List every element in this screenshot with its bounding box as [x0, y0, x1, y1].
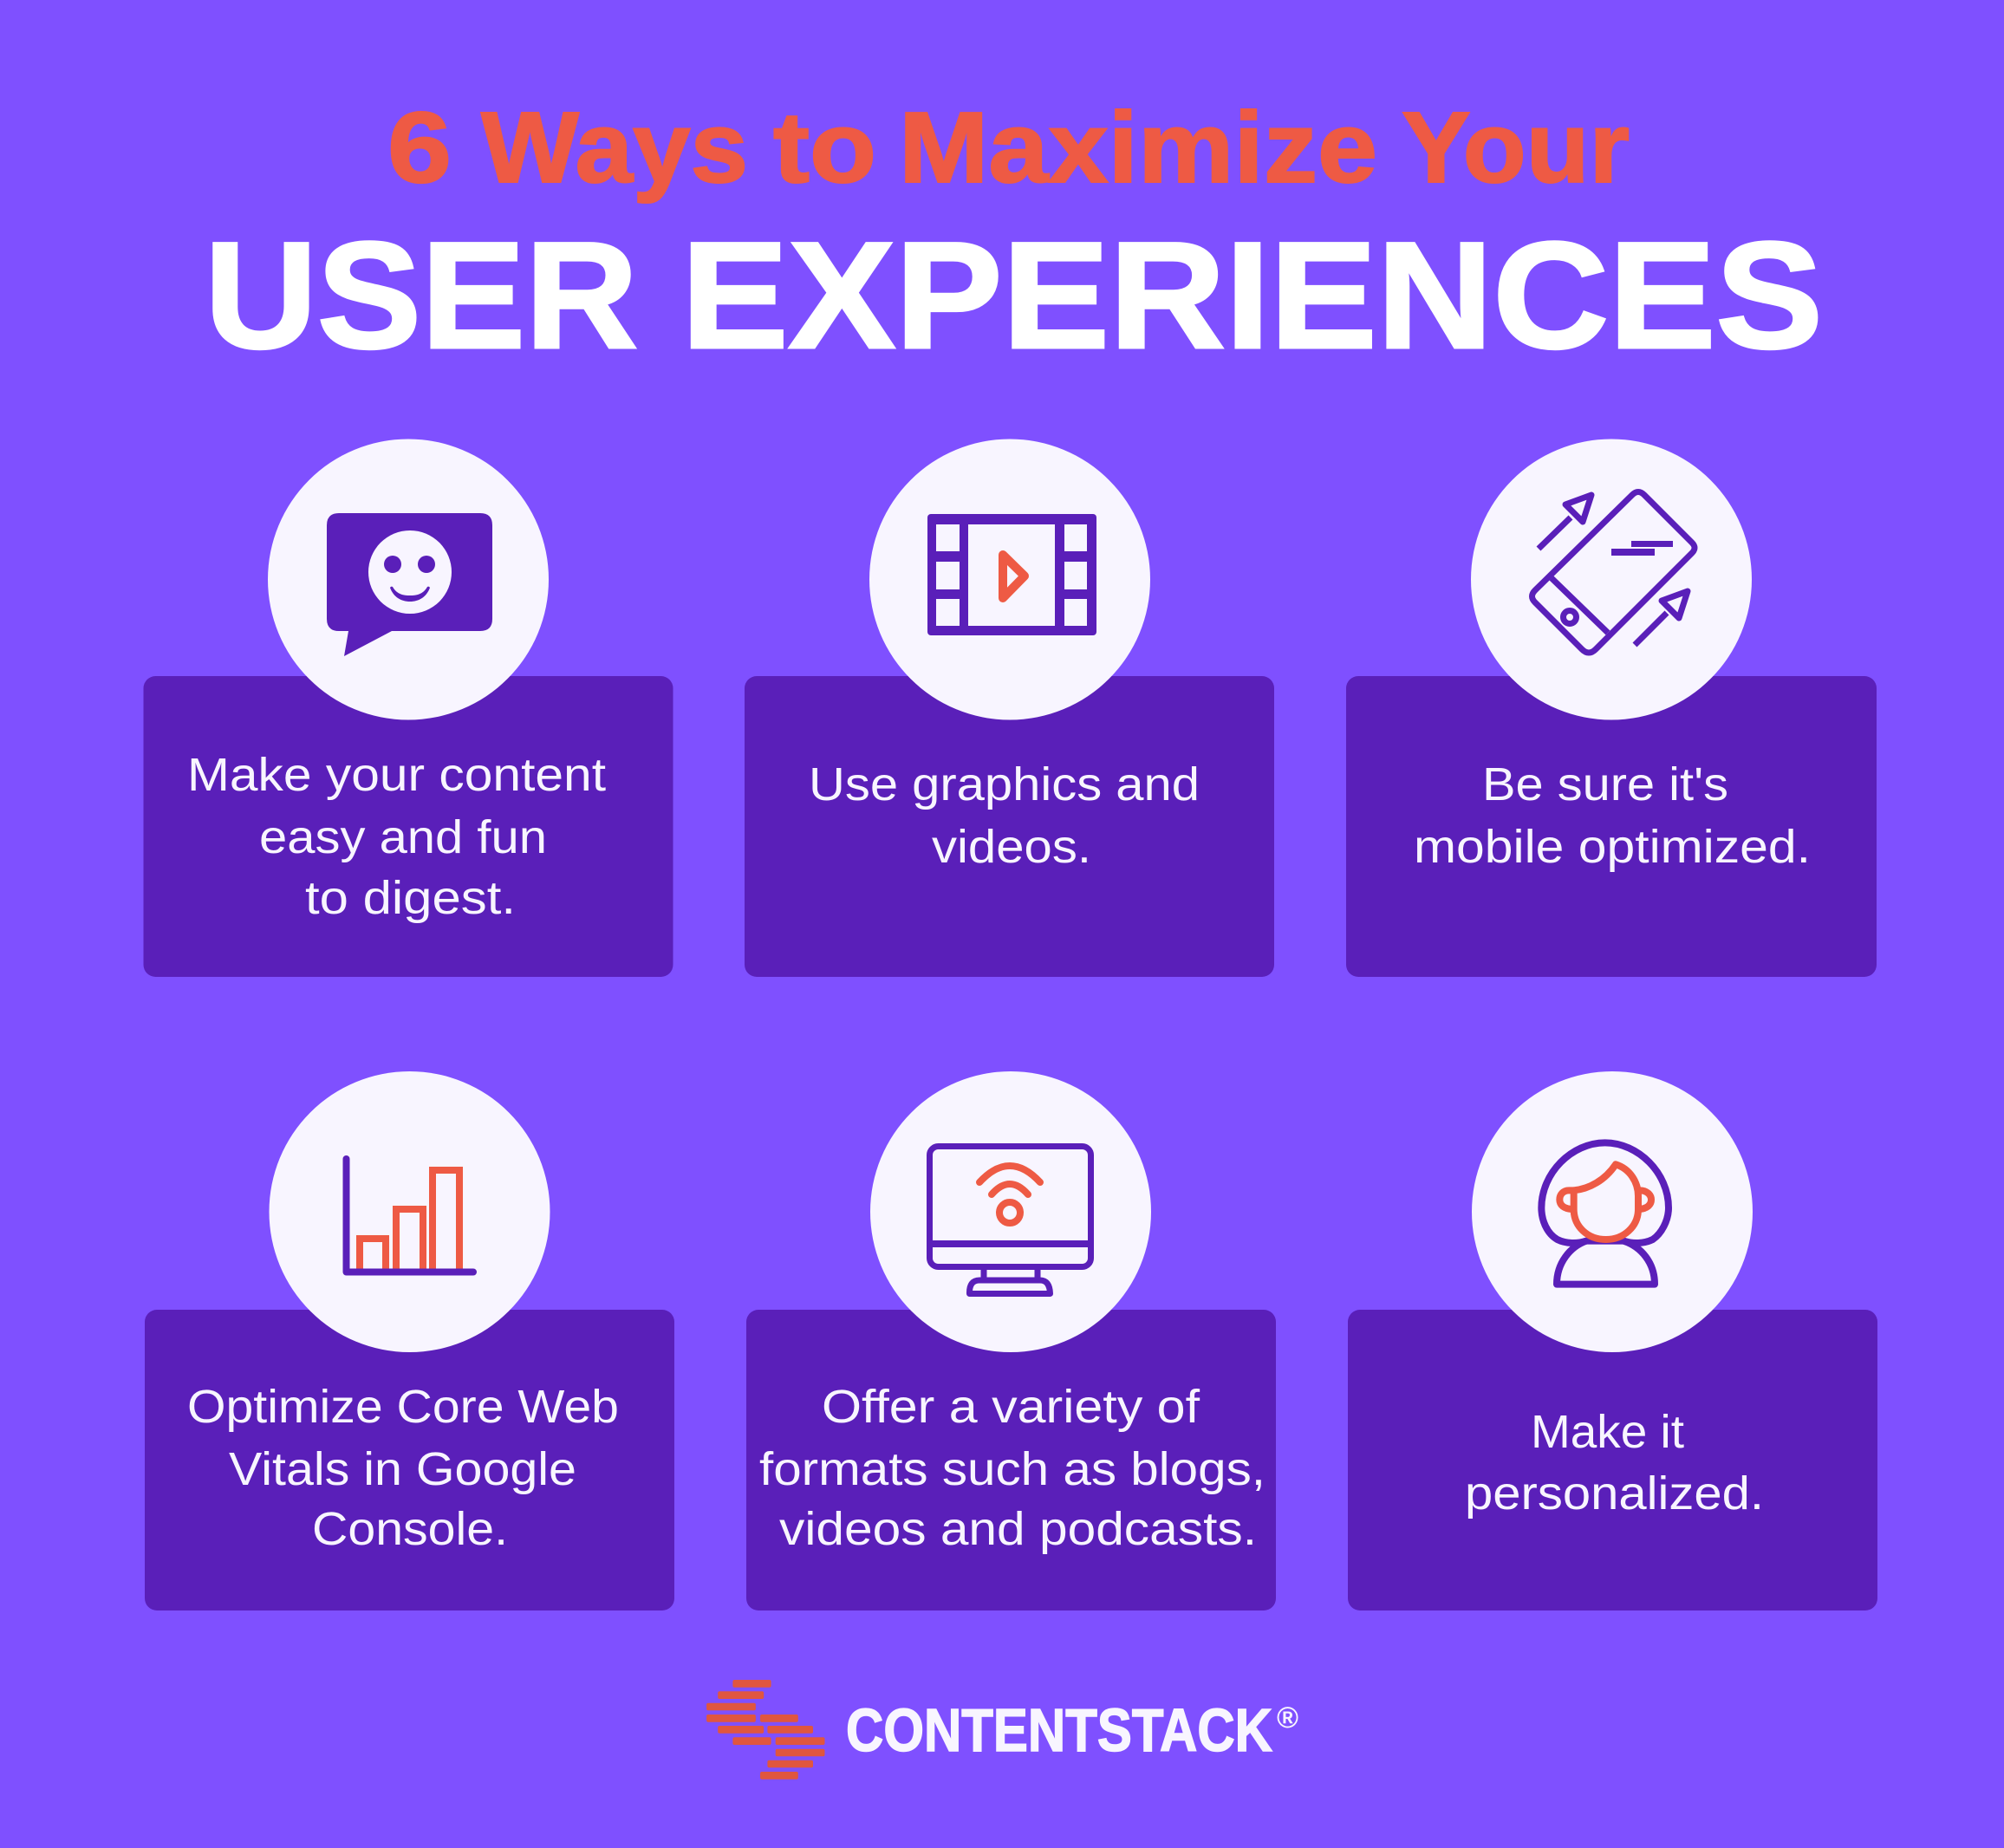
card text — [759, 1381, 1266, 1555]
title — [205, 91, 1823, 381]
icon: smiley speech bubble — [327, 513, 492, 656]
card text: Make your content — [187, 749, 606, 801]
icon: film strip with play — [927, 514, 1096, 635]
title line 2: EXPERIENCES — [681, 211, 1823, 381]
title line 2: USER — [205, 211, 638, 381]
panel: mobile optimized — [1346, 439, 1877, 977]
panel: make content easy — [144, 439, 673, 977]
title line 1: Your — [1402, 91, 1630, 204]
icon: bar chart — [347, 1159, 473, 1272]
icon: tilted phone with arrows — [1532, 492, 1695, 653]
title line 1: Ways — [481, 91, 748, 204]
card text — [1465, 1406, 1764, 1519]
card text: videos and podcasts. — [779, 1503, 1257, 1555]
card text: Optimize Core Web — [187, 1381, 619, 1433]
card text: formats such as blogs, — [759, 1443, 1266, 1495]
card text: videos. — [932, 821, 1091, 873]
card text: personalized. — [1465, 1467, 1764, 1519]
card text — [1414, 758, 1811, 873]
icon circle — [869, 439, 1150, 719]
card text: easy and fun — [259, 811, 547, 863]
panel: personalized — [1348, 1071, 1877, 1610]
panel: graphics and videos — [745, 439, 1274, 977]
card text: to digest. — [305, 872, 516, 924]
card text — [809, 758, 1200, 873]
card background — [745, 676, 1274, 977]
icon circle — [269, 1071, 550, 1352]
card background — [144, 676, 673, 977]
registered mark: ® — [1277, 1702, 1298, 1734]
card text — [187, 749, 606, 924]
card text: Console. — [312, 1503, 508, 1555]
card text: mobile optimized. — [1414, 821, 1811, 873]
panel: variety of formats — [746, 1071, 1276, 1610]
logo mark — [706, 1680, 825, 1780]
icon circle — [268, 439, 549, 719]
panel: core web vitals — [145, 1071, 674, 1610]
card text — [187, 1381, 619, 1555]
card text: Use graphics and — [809, 758, 1200, 810]
card text: Be sure it's — [1482, 758, 1728, 810]
card text: Make it — [1531, 1406, 1684, 1458]
title line 1 — [387, 91, 1630, 204]
icon circle — [870, 1071, 1151, 1352]
icon: person — [1541, 1142, 1669, 1285]
card background — [746, 1310, 1276, 1610]
icon: monitor with wifi — [929, 1146, 1091, 1293]
icon circle — [1472, 1071, 1753, 1352]
icon circle — [1471, 439, 1752, 719]
logo: Contentstack — [706, 1680, 1298, 1780]
card background — [145, 1310, 674, 1610]
title line 2 — [205, 211, 1823, 381]
title line 1: Maximize — [899, 91, 1377, 204]
title line 1: 6 — [387, 91, 452, 204]
title line 1: to — [773, 91, 876, 204]
card text: Vitals in Google — [229, 1443, 576, 1495]
logo wordmark: CONTENTSTACK — [846, 1696, 1272, 1764]
card text: Offer a variety of — [822, 1381, 1200, 1433]
card background — [1348, 1310, 1877, 1610]
card background — [1346, 676, 1877, 977]
